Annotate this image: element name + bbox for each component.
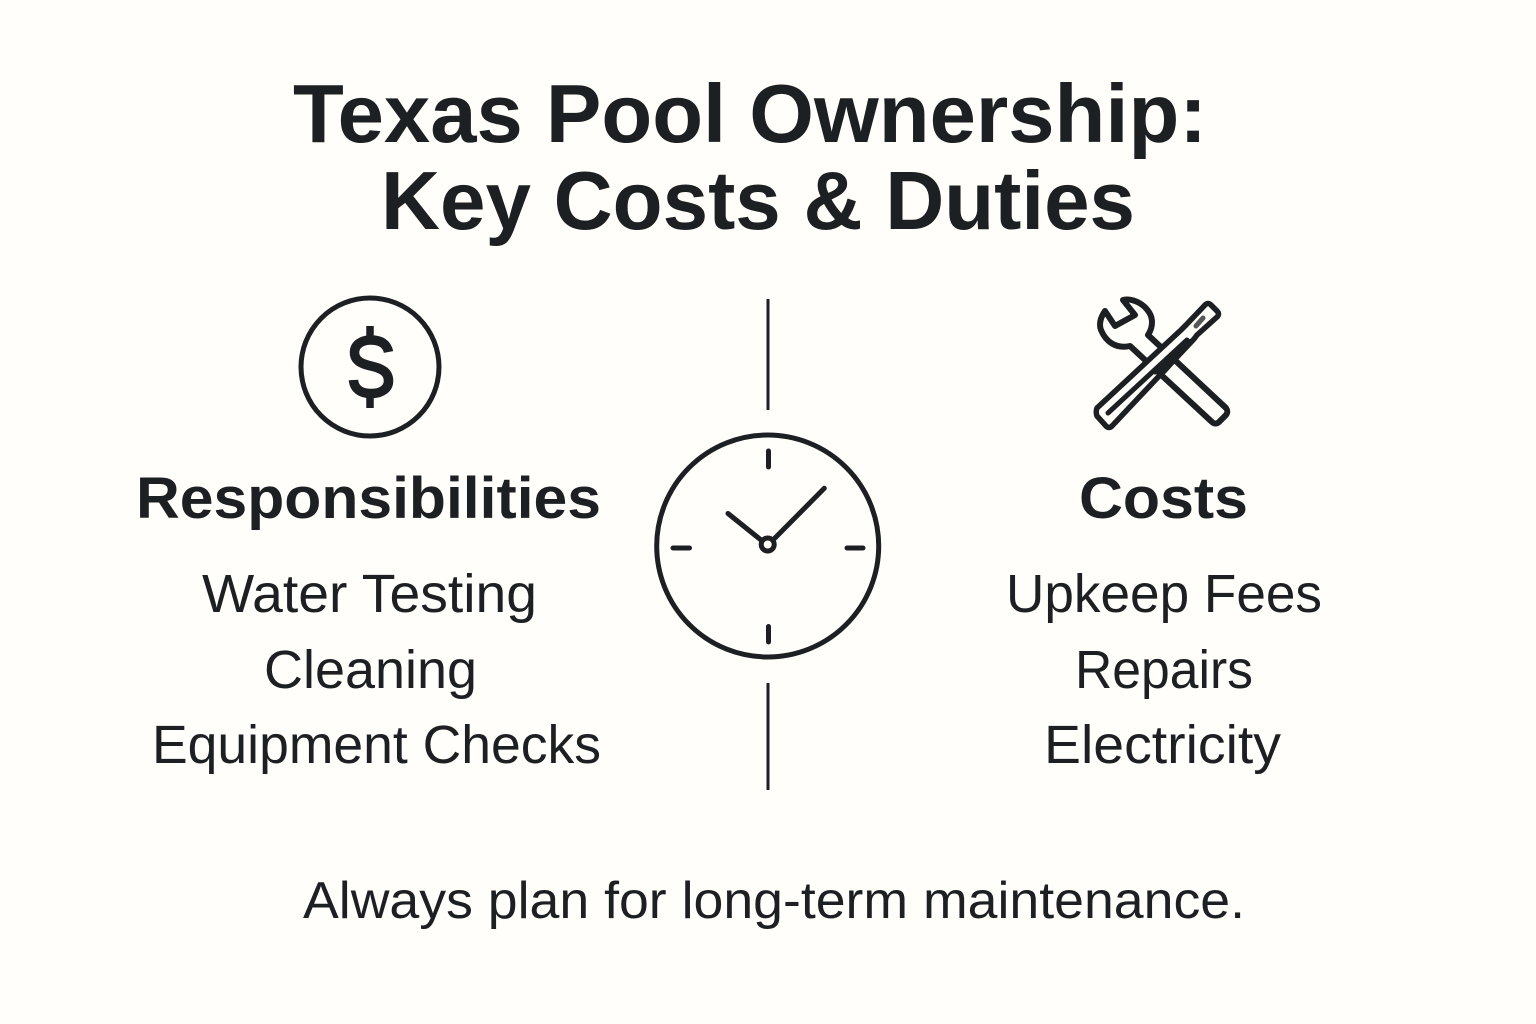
list: costs: Upkeep Fees [1006,564,1322,624]
panel: costs [1006,300,1322,775]
divider: upper line [766,299,770,410]
list: costs: Electricity [1044,715,1281,775]
panel: responsibilities [136,298,601,775]
title [293,67,1207,247]
list: costs [1006,564,1322,775]
title: Key Costs & Duties [381,154,1135,247]
footer note: Always plan for long-term maintenance. [303,872,1245,930]
heading: responsibilities: Responsibilities [136,466,601,531]
wrench [1100,300,1227,424]
heading: costs: Costs [1079,466,1248,531]
list: responsibilities: Equipment Checks [152,715,601,775]
divider: lower line [766,683,770,790]
list: responsibilities: Cleaning [264,640,477,700]
icon: crossed wrench and screwdriver [1096,300,1227,428]
screwdriver [1096,304,1218,428]
panel: center clock divider [657,299,879,790]
list: responsibilities [152,564,601,775]
title: Texas Pool Ownership: [293,67,1207,160]
list: responsibilities: Water Testing [202,564,537,624]
icon: clock [657,435,879,657]
icon: dollar coin [301,298,439,436]
list: costs: Repairs [1075,640,1253,700]
